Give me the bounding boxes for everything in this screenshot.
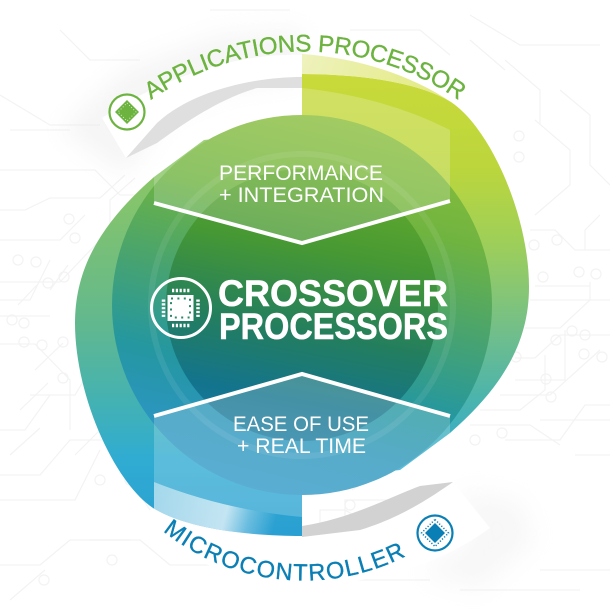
text: ease of use + real time: EASE OF USE <box>233 412 369 436</box>
soft shadow behind applications ribbon <box>60 30 302 175</box>
soft shadow behind microcontroller ribbon <box>420 490 535 590</box>
text: performance + integration: PERFORMANCE <box>219 161 383 185</box>
icon: applications processor chip <box>110 94 144 130</box>
middle disc <box>112 115 492 495</box>
inner core disc <box>166 169 438 441</box>
grey crescent: top left <box>126 77 302 158</box>
text: performance + integration: + INTEGRATION <box>219 183 384 207</box>
icon: microcontroller chip <box>418 516 452 550</box>
white ribbon: microcontroller <box>160 482 490 585</box>
title: crossover processors: PROCESSORS <box>219 306 448 347</box>
pale yellow overhang above the right band <box>302 54 451 102</box>
curved label: microcontroller: MICROCONTROLLER <box>164 519 406 581</box>
white ribbon: applications processor <box>102 55 302 158</box>
faint light ring <box>151 154 453 456</box>
title: crossover processors: CROSSOVER <box>218 273 448 314</box>
grey crescent: bottom right <box>302 482 453 537</box>
text: ease of use + real time <box>233 412 369 458</box>
text: ease of use + real time: + REAL TIME <box>237 434 366 458</box>
main swirl graphic <box>75 74 529 536</box>
upper translucent panel <box>154 88 450 243</box>
text: performance + integration <box>219 161 384 207</box>
title: crossover processors <box>218 273 448 347</box>
lower left fade band <box>154 482 274 534</box>
chevron: top <box>154 201 450 243</box>
lower translucent panel <box>154 373 450 517</box>
right outer band <box>302 74 529 480</box>
curved label: applications processor: APPLICATIONS PROCESSOR <box>147 34 465 100</box>
left outer band <box>75 130 302 536</box>
chevron: bottom <box>154 374 450 416</box>
icon: central chip <box>152 278 210 338</box>
